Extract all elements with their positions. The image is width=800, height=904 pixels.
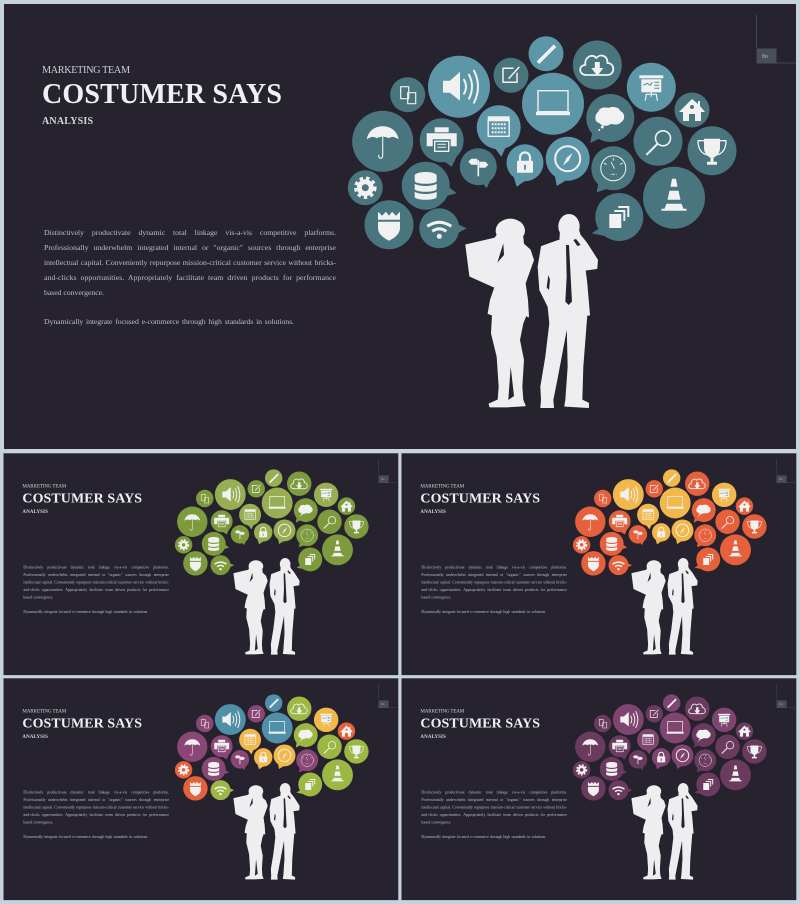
page tag: 8o: [762, 54, 768, 60]
icon bubble cloud: [175, 694, 369, 801]
icon: laptop: [522, 73, 584, 135]
page tag: [379, 684, 398, 708]
icon: lock: [506, 144, 544, 187]
man head: [558, 214, 580, 239]
body text: Professionally underwhelm integrated internal or "organic" sources through enterprise: [23, 573, 169, 577]
title: COSTUMER SAYS: [420, 492, 540, 507]
icon: gear: [348, 170, 383, 205]
body text: Professionally underwhelm integrated internal or "organic" sources through enterprise: [23, 798, 169, 802]
slide: multicolour: [3, 678, 398, 900]
icon: stacked squares: [592, 193, 643, 241]
body text: Distinctively productivate dynamic total linkage vis-a-vis competitive platforms.: [44, 228, 336, 237]
title: COSTUMER SAYS: [22, 717, 142, 732]
title: COSTUMER SAYS: [420, 717, 540, 732]
body text: [421, 565, 568, 614]
body text: [23, 790, 170, 839]
woman leg gap: [508, 367, 514, 400]
body text: based convergence.: [421, 595, 451, 599]
subtitle: ANALYSIS: [420, 510, 446, 515]
body text: based convergence.: [23, 820, 53, 824]
woman head: [496, 219, 525, 243]
icon: speaker: [428, 56, 490, 118]
page tag: 8o: [381, 477, 385, 481]
body text: intellectual capital. Conveniently repurpose mission-critical customer service without bricks-: [421, 580, 568, 584]
icon bubble cloud: [573, 469, 767, 576]
man in suit: [538, 230, 597, 407]
icon: printer: [420, 118, 464, 167]
silhouettes: [234, 558, 299, 654]
body text: Dynamically integrate focused e-commerce through high standards in solutions.: [44, 317, 294, 326]
body text: and-clicks opportunities. Appropriately facilitate team driven products for performance: [421, 588, 567, 592]
icon: compass: [546, 137, 590, 186]
icon: wifi: [419, 208, 467, 248]
slide: green: [3, 453, 398, 675]
body text: Distinctively productivate dynamic total linkage vis-a-vis competitive platforms.: [23, 790, 169, 794]
icon: cloud download: [573, 40, 622, 90]
subtitle: ANALYSIS: [42, 116, 93, 127]
page tag: [777, 684, 796, 708]
subtitle: ANALYSIS: [420, 735, 446, 740]
icon: trophy: [688, 126, 736, 175]
body text: intellectual capital. Conveniently repurpose mission-critical customer service without bricks-: [421, 805, 568, 809]
body text: [421, 790, 568, 839]
icon: pencil: [528, 36, 564, 71]
page tag: [756, 15, 796, 64]
icon: presentation: [627, 63, 676, 112]
body text: Professionally underwhelm integrated internal or "organic" sources through enterprise: [44, 243, 337, 252]
subtitle: ANALYSIS: [22, 735, 48, 740]
body text: Professionally underwhelm integrated internal or "organic" sources through enterprise: [421, 573, 567, 577]
body text: and-clicks opportunities. Appropriately facilitate team driven products for performance: [421, 813, 567, 817]
silhouettes: two business people: [466, 214, 597, 407]
icon: database: [402, 162, 457, 210]
man tie: [565, 245, 572, 305]
man arm gap: [547, 275, 550, 290]
main slide: teal: [4, 4, 796, 449]
title: COSTUMER SAYS: [42, 79, 282, 110]
body text: Distinctively productivate dynamic total linkage vis-a-vis competitive platforms.: [421, 790, 567, 794]
body text: Dynamically integrate focused e-commerce through high standards in solutions.: [421, 835, 546, 839]
body text: based convergence.: [44, 288, 104, 297]
body text: intellectual capital. Conveniently repurpose mission-critical customer service without bricks-: [23, 805, 170, 809]
icon: magnifier: [634, 117, 682, 166]
kicker: MARKETING TEAM: [42, 65, 130, 76]
subtitle: ANALYSIS: [22, 510, 48, 515]
body text: Professionally underwhelm integrated internal or "organic" sources through enterprise: [421, 798, 567, 802]
body text: Dynamically integrate focused e-commerce through high standards in solutions.: [23, 835, 148, 839]
icon bubble cloud: [348, 36, 736, 249]
woman with document: [466, 233, 533, 407]
icon: house: [674, 92, 710, 128]
body text: intellectual capital. Conveniently repurpose mission-critical customer service without bricks-: [44, 258, 336, 267]
woman arm gap: [497, 243, 504, 263]
icon: direction signs: [460, 148, 497, 188]
body text: Distinctively productivate dynamic total linkage vis-a-vis competitive platforms.: [23, 565, 169, 569]
body text: and-clicks opportunities. Appropriately facilitate team driven products for performance: [23, 588, 169, 592]
icon: gauge: [591, 146, 635, 192]
silhouettes: [234, 783, 299, 879]
kicker: MARKETING TEAM: [420, 709, 465, 715]
icon: calendar: [477, 105, 521, 157]
silhouettes: [632, 783, 697, 879]
slide: plum: [401, 678, 796, 900]
page tag: 8o: [381, 702, 385, 706]
icon: thought bubble: [586, 94, 634, 143]
silhouettes: [632, 558, 697, 654]
icon: traffic cone: [643, 167, 705, 229]
body text: Distinctively productivate dynamic total linkage vis-a-vis competitive platforms.: [421, 565, 567, 569]
body text: intellectual capital. Conveniently repurpose mission-critical customer service without bricks-: [23, 580, 170, 584]
body text: and-clicks opportunities. Appropriately facilitate team driven products for performance: [44, 273, 337, 282]
page tag: [777, 459, 796, 483]
icon: shield: [364, 200, 414, 249]
page tag: 8o: [779, 702, 783, 706]
kicker: MARKETING TEAM: [420, 484, 465, 490]
page tag: [379, 459, 398, 483]
icon: edit: [494, 58, 528, 93]
man phone hand: [573, 239, 581, 246]
body text: [23, 565, 170, 614]
page tag: 8o: [779, 477, 783, 481]
kicker: MARKETING TEAM: [22, 709, 67, 715]
title: COSTUMER SAYS: [22, 492, 142, 507]
body text: Dynamically integrate focused e-commerce through high standards in solutions.: [421, 610, 546, 614]
icon: umbrella: [352, 111, 413, 172]
kicker: MARKETING TEAM: [22, 484, 67, 490]
body text: based convergence.: [421, 820, 451, 824]
body text: Dynamically integrate focused e-commerce through high standards in solutions.: [23, 610, 148, 614]
body text: based convergence.: [23, 595, 53, 599]
icon bubble cloud: [175, 469, 369, 576]
slide: orange: [401, 453, 796, 675]
icon: devices: [390, 77, 425, 112]
icon bubble cloud: [573, 694, 767, 801]
body text: [44, 228, 337, 326]
body text: and-clicks opportunities. Appropriately facilitate team driven products for performance: [23, 813, 169, 817]
